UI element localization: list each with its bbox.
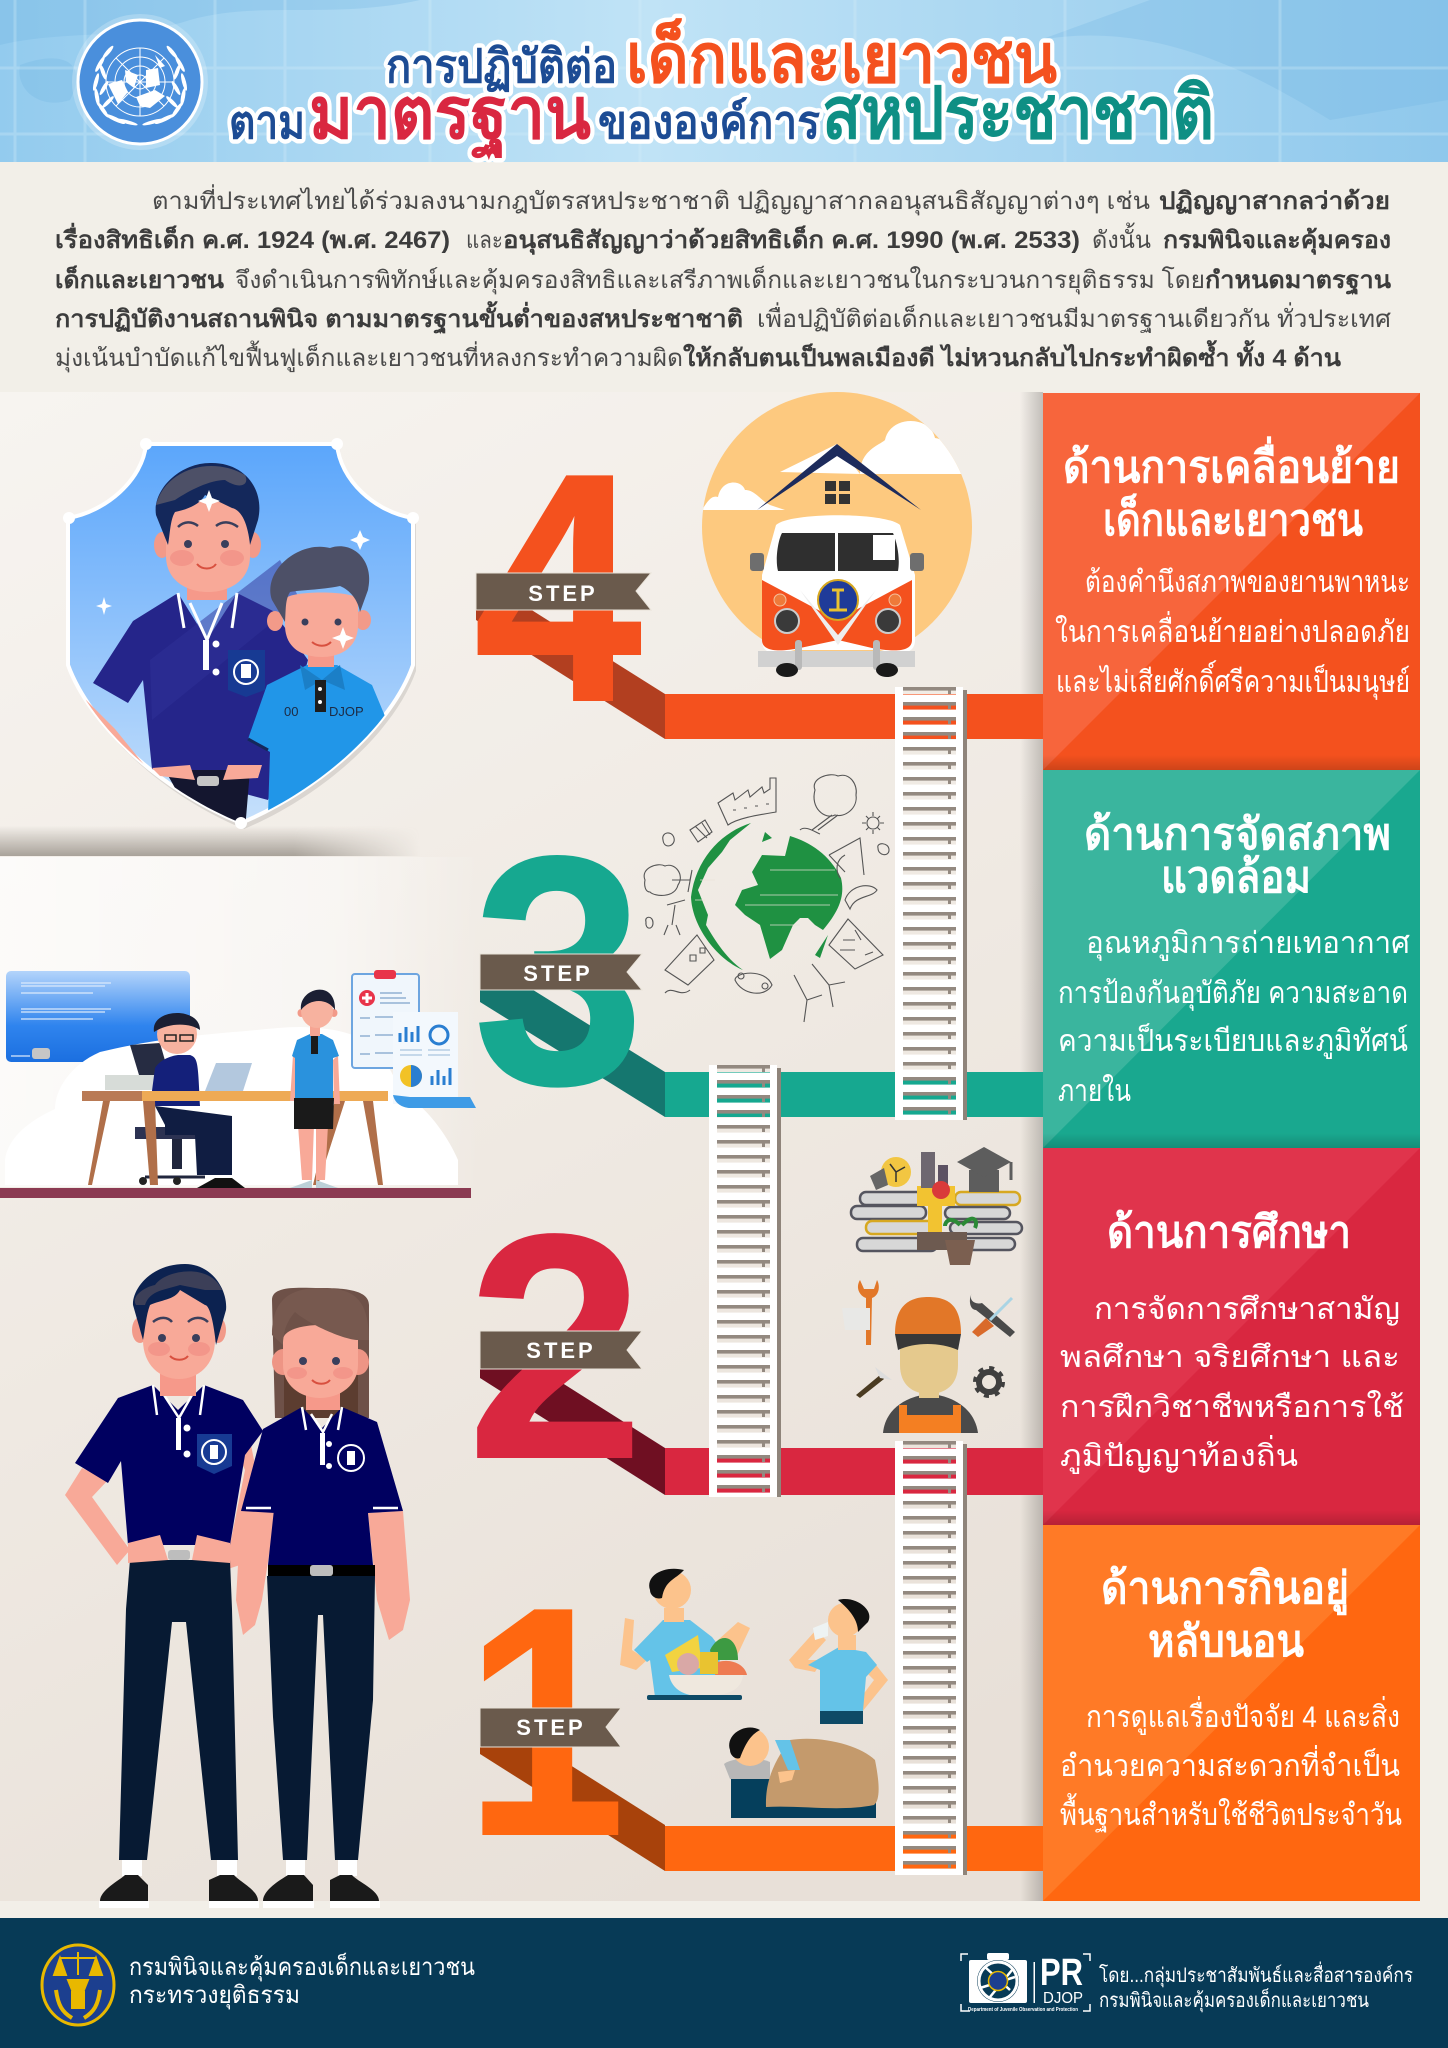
icon: person eating xyxy=(620,1569,750,1700)
step 3 graphic xyxy=(472,787,1043,1154)
icon: PR DJOP logo xyxy=(961,1952,1090,2013)
intro paragraph xyxy=(55,184,1392,373)
intro paragraph: จึงดำเนินการพิทักษ์และคุ้มครองสิทธิและเสรีภาพเด็กและเยาวชนในกระบวนการยุติธรรม โดย xyxy=(235,265,1205,295)
icon: PR DJOP logo: DJOP xyxy=(1043,1990,1083,2007)
ribbon: step 4: STEP xyxy=(528,581,598,606)
text: education: การฝึกวิชาชีพหรือการใช้ xyxy=(1060,1390,1404,1424)
title: ตาม xyxy=(229,96,305,148)
intro paragraph: อนุสนธิสัญญาว่าด้วยสิทธิเด็ก ค.ศ. 1990 (พ.ศ. 2533) xyxy=(503,225,1080,256)
ribbon: step 1 xyxy=(480,1708,621,1747)
panel: transport xyxy=(1043,393,1420,770)
text: living: พื้นฐานสำหรับใช้ชีวิตประจำวัน xyxy=(1060,1793,1402,1833)
icon: person sleeping xyxy=(724,1728,879,1818)
icon: clipboard and reports xyxy=(352,970,476,1108)
text: living xyxy=(1060,1696,1402,1833)
intro paragraph: ให้กลับตนเป็นพลเมืองดี ไม่หวนกลับไปกระทำผิดซ้ำ ทั้ง 4 ด้าน xyxy=(683,339,1342,372)
text: education xyxy=(1060,1293,1404,1474)
intro paragraph: มุ่งเน้นบำบัดแก้ไขฟื้นฟูเด็กและเยาวชนที่หลงกระทำความผิด xyxy=(55,340,683,373)
heading: living: หลับนอน xyxy=(1148,1617,1304,1666)
footer band xyxy=(0,1918,1448,2048)
heading: environment: ด้านการจัดสภาพ xyxy=(1084,810,1391,859)
heading: living xyxy=(1101,1564,1349,1666)
title: มาตรฐาน xyxy=(309,74,591,160)
intro paragraph: กำหนดมาตรฐาน xyxy=(1205,267,1392,296)
intro paragraph: และ xyxy=(466,227,503,254)
text: living: การดูแลเรื่องปัจจัย 4 และสิ่ง xyxy=(1086,1696,1400,1735)
text: environment: ภายใน xyxy=(1058,1074,1131,1108)
text: living: อำนวยความสะดวกที่จำเป็น xyxy=(1060,1745,1400,1783)
footer text: credit: กรมพินิจและคุ้มครองเด็กและเยาวชน xyxy=(1099,1987,1369,2013)
heading: education: ด้านการศึกษา xyxy=(1107,1208,1351,1257)
text: education: การจัดการศึกษาสามัญ xyxy=(1094,1293,1400,1326)
ribbon: step 3: STEP xyxy=(523,961,593,986)
numeral 1: 1 xyxy=(464,1538,626,1905)
heading: environment xyxy=(1084,810,1391,902)
icon: person drinking xyxy=(789,1599,888,1724)
ribbon: step 3 xyxy=(480,954,642,990)
main infographic background xyxy=(0,392,1420,1901)
panel: living xyxy=(1043,1525,1420,1901)
illustration: officer at desk with boy xyxy=(0,970,476,1198)
heading: transport xyxy=(1063,436,1400,545)
icon: books and study items xyxy=(851,1147,1022,1265)
intro paragraph: ปฏิญญาสากลว่าด้วย xyxy=(1159,188,1390,215)
illustration: officer and boy in shield xyxy=(0,438,480,1187)
text: transport xyxy=(1055,566,1410,701)
ribbon: step 1: STEP xyxy=(516,1715,586,1740)
text: education: ภูมิปัญญาท้องถิ่น xyxy=(1060,1435,1298,1474)
icon: technician with tools xyxy=(842,1280,1015,1433)
intro paragraph: เด็กและเยาวชน xyxy=(55,265,225,294)
numeral 3: 3 xyxy=(472,787,645,1154)
text: environment: ความเป็นระเบียบและภูมิทัศน์ xyxy=(1058,1022,1408,1059)
heading: transport: ด้านการเคลื่อนย้าย xyxy=(1063,436,1400,492)
text: shirt labels: DJOP xyxy=(329,704,364,719)
step 4 graphic xyxy=(473,405,1043,771)
footer text: department: กระทรวงยุติธรรม xyxy=(129,1982,300,2010)
heading: living: ด้านการกินอยู่ xyxy=(1101,1564,1349,1615)
title: เด็กและเยาวชน xyxy=(626,18,1057,97)
title xyxy=(229,18,1214,160)
logo: United Nations emblem xyxy=(72,14,208,150)
ribbon: step 2 xyxy=(480,1331,642,1369)
ladder: upper right xyxy=(895,687,967,1120)
heading: transport: เด็กและเยาวชน xyxy=(1103,493,1363,545)
intro paragraph: ตามที่ประเทศไทยได้ร่วมลงนามกฎบัตรสหประชาชาติ ปฏิญญาสากลอนุสนธิสัญญาต่างๆ เช่น xyxy=(152,184,1150,216)
text: transport: ในการเคลื่อนย้ายอย่างปลอดภัย xyxy=(1055,611,1410,649)
icon: PR DJOP logo: PR xyxy=(1040,1952,1083,1994)
intro paragraph: เรื่องสิทธิเด็ก ค.ศ. 1924 (พ.ศ. 2467) xyxy=(55,222,450,254)
desk legs xyxy=(88,1101,383,1185)
ladder: middle left xyxy=(709,1065,781,1497)
intro paragraph: การปฏิบัติงานสถานพินิจ ตามมาตรฐานขั้นต่ำของสหประชาชาติ xyxy=(55,300,743,335)
title: การปฏิบัติต่อ xyxy=(386,40,617,92)
intro paragraph: เพื่อปฏิบัติต่อเด็กและเยาวชนมีมาตรฐานเดียวกัน ทั่วประเทศ xyxy=(757,302,1391,333)
figure: seated officer xyxy=(105,1013,252,1188)
icon: green globe with doodles xyxy=(644,775,889,1022)
numeral 4: 4 xyxy=(473,405,645,771)
intro paragraph: กรมพินิจและคุ้มครอง xyxy=(1163,227,1391,256)
icon: van, house and sun xyxy=(702,392,978,677)
text: environment: อุณหภูมิการถ่ายเทอากาศ xyxy=(1086,927,1410,962)
text: education: พลศึกษา จริยศึกษา และ xyxy=(1060,1341,1400,1374)
figure: standing boy xyxy=(290,990,340,1188)
figure: woman xyxy=(236,1288,410,1908)
title: สหประชาชาติ xyxy=(822,74,1214,154)
numeral 2: 2 xyxy=(466,1168,645,1527)
ladder: lower right xyxy=(895,1441,967,1875)
step 1 graphic xyxy=(464,1538,1043,1905)
header band xyxy=(0,0,1448,162)
text: environment xyxy=(1058,927,1410,1108)
footer text: credit xyxy=(1099,1961,1413,2013)
ribbon: step 2: STEP xyxy=(526,1338,596,1363)
footer text: department xyxy=(129,1952,475,2010)
icon: PR DJOP logo: Department of Juvenile Observation and Protection xyxy=(968,2007,1078,2013)
text: shirt labels xyxy=(284,707,363,716)
icon: department seal xyxy=(42,1945,114,2025)
ribbon: step 4 xyxy=(476,573,651,610)
panel: education xyxy=(1043,1148,1420,1525)
figure: man xyxy=(65,1264,263,1908)
heading: environment: แวดล้อม xyxy=(1161,853,1311,902)
footer text: department: กรมพินิจและคุ้มครองเด็กและเยาวชน xyxy=(129,1952,475,1982)
title: ขององค์การ xyxy=(598,96,820,148)
globe continents xyxy=(691,823,842,970)
illustration: officers standing xyxy=(65,1264,410,1908)
intro paragraph: ดังนั้น xyxy=(1092,222,1151,254)
step 2 graphic xyxy=(466,1168,1043,1527)
panel: environment xyxy=(1043,770,1420,1148)
text: shirt labels: 00 xyxy=(284,704,298,719)
